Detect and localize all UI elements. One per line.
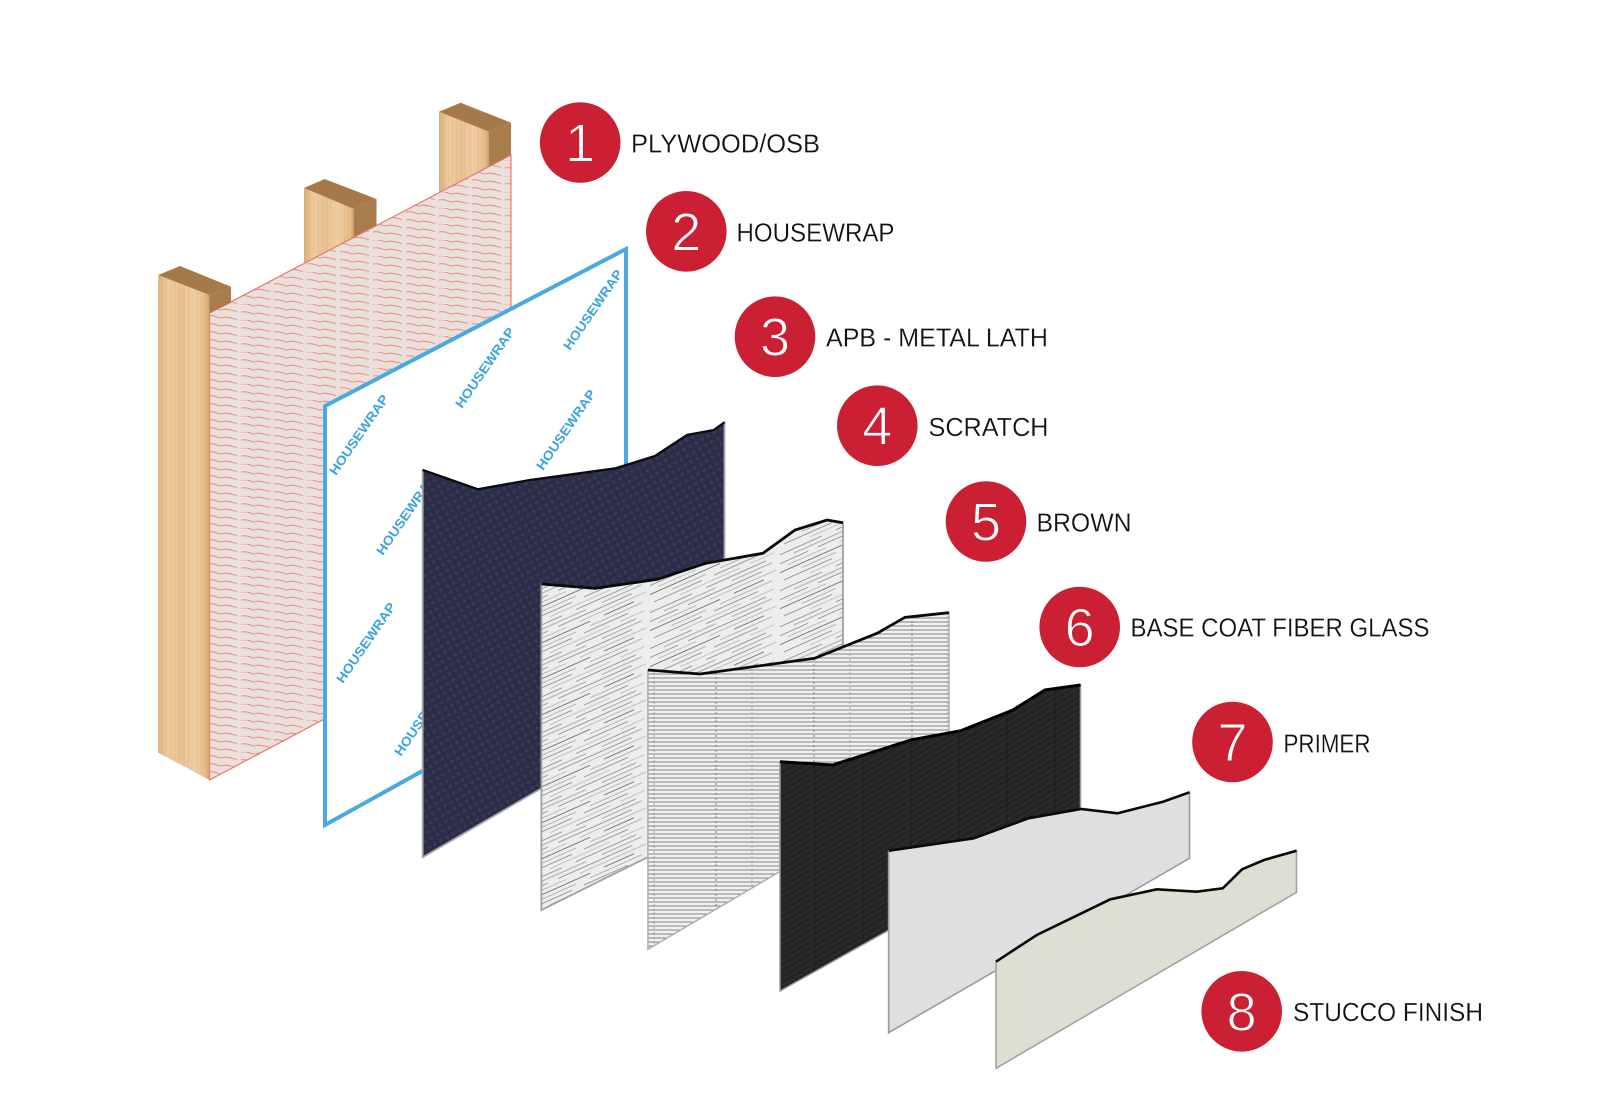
stud: middle wood post <box>304 179 376 290</box>
callout 1: plywood/OSB: 1 <box>565 114 595 174</box>
callout 2: housewrap <box>646 191 894 272</box>
callout 4: scratch: 4 <box>862 397 892 457</box>
callout 6: base coat fiber glass <box>1039 587 1430 667</box>
callout 1: plywood/OSB <box>540 102 820 183</box>
layer 2: housewrap sheet: HOUSEWRAP <box>391 672 457 759</box>
callout 2: housewrap: 2 <box>671 202 701 262</box>
callout 7: primer: PRIMER <box>1284 728 1370 758</box>
layer 6: base coat fiber glass sheet <box>780 685 1080 991</box>
layer 7: primer sheet <box>889 792 1190 1033</box>
layer 2: housewrap sheet: HOUSEWRAP <box>560 266 626 353</box>
callout 5: brown: BROWN <box>1036 508 1132 538</box>
layer 2: housewrap sheet: HOUSEWRAP <box>333 599 399 686</box>
callout 4: scratch <box>837 385 1048 466</box>
callout 6: base coat fiber glass: 6 <box>1065 598 1095 658</box>
callout 3: APB - metal lath <box>735 296 1048 377</box>
callout 6: base coat fiber glass: BASE COAT FIBER GLASS <box>1130 613 1430 643</box>
callout 5: brown: 5 <box>971 492 1001 552</box>
stud: right wood post <box>439 103 511 210</box>
layer 2: housewrap sheet: HOUSEWRAP <box>533 386 599 473</box>
callout 3: APB - metal lath: APB - METAL LATH <box>826 323 1048 353</box>
layer 8: stucco finish sheet <box>996 851 1296 1068</box>
layer 2: housewrap sheet: HOUSEWRAP <box>326 391 392 478</box>
layer 4: scratch coat sheet <box>541 520 843 910</box>
callout 7: primer <box>1192 702 1370 782</box>
callout 8: stucco finish: 8 <box>1227 982 1257 1042</box>
callout 8: stucco finish: STUCCO FINISH <box>1293 997 1483 1027</box>
callout 3: APB - metal lath: 3 <box>760 308 790 368</box>
callout 4: scratch: SCRATCH <box>928 412 1048 442</box>
callout 8: stucco finish <box>1201 971 1483 1052</box>
layer 2: housewrap sheet: HOUSEWRAP <box>373 471 439 558</box>
layer 5: brown coat sheet <box>648 613 949 949</box>
callout 5: brown <box>946 481 1132 562</box>
stud: left wood post <box>158 266 231 780</box>
callout 7: primer: 7 <box>1217 713 1248 773</box>
callout 1: plywood/OSB: PLYWOOD/OSB <box>631 129 820 159</box>
layer 3: APB metal lath sheet <box>423 422 724 857</box>
layer 1: plywood/OSB sheet <box>210 155 511 780</box>
layer 2: housewrap sheet <box>325 249 626 825</box>
layer 2: housewrap sheet: HOUSEWRAP <box>452 324 518 411</box>
callout 2: housewrap: HOUSEWRAP <box>736 218 894 248</box>
